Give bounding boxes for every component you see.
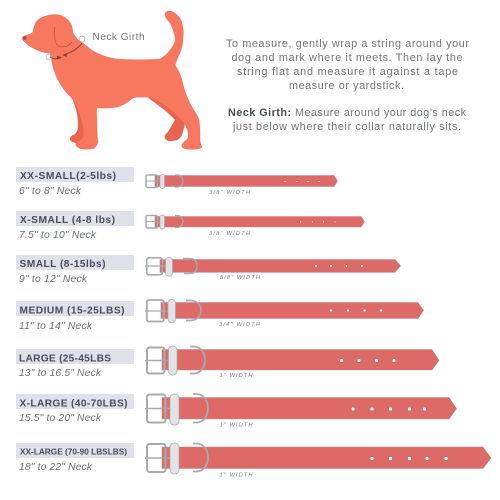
row: x-small: 7.5" to 10" Neck (19, 230, 97, 241)
row: small: SMALL (8-15lbs) (20, 259, 106, 270)
row: xx-large: 18" to 22" Neck (19, 462, 93, 473)
row: xx-large (16, 443, 491, 478)
far legs (70, 96, 185, 143)
instructions paragraph: dog and mark where it meets. Then lay the (232, 52, 462, 64)
row: large: 1" WIDTH (220, 373, 253, 379)
nose (22, 36, 26, 40)
collar (155, 176, 338, 186)
row: xx-small (16, 167, 338, 197)
row: x-large: 1" WIDTH (220, 422, 253, 428)
row: medium (16, 300, 424, 332)
row: x-large: 15.5" to 20" Neck (19, 413, 102, 424)
neck girth instructions: Neck Girth: Measure around your dog’s neck (228, 107, 467, 119)
row: x-small: X-SMALL (4-8 lbs) (20, 215, 115, 226)
row: xx-large: 1" WIDTH (220, 472, 253, 478)
girth arrows (57, 53, 67, 60)
row: xx-small: 6" to 8" Neck (19, 186, 82, 197)
instructions paragraph: To measure, gently wrap a string around your (226, 38, 469, 50)
row: small (16, 255, 400, 285)
instructions paragraph: measure or yardstick. (289, 80, 404, 92)
row: x-small (16, 211, 364, 241)
row: large: 13" to 16.5" Neck (19, 368, 102, 379)
size label (16, 167, 134, 182)
dog illustration (22, 11, 202, 149)
row: xx-large: XX-LARGE (70-90 LBSLBS) (20, 446, 127, 456)
row: large: LARGE (25-45LBS (19, 354, 111, 364)
row: medium: 11" to 14" Neck (19, 321, 93, 332)
dog body (23, 11, 202, 149)
row: small: 9" to 12" Neck (19, 274, 88, 285)
row: small: 5/8" WIDTH (220, 275, 261, 281)
row: x-small: 3/8" WIDTH (209, 231, 251, 237)
neck girth string (50, 43, 82, 59)
row: x-large: X-LARGE (40-70LBS) (20, 398, 128, 410)
row: x-large (16, 394, 456, 428)
row: medium: 3/4" WIDTH (219, 322, 261, 328)
neck girth instructions (228, 107, 467, 133)
row: large (16, 346, 439, 379)
row: xx-small: XX-SMALL(2-5lbs) (20, 171, 116, 182)
ear (54, 27, 72, 47)
row: xx-small: 3/8" WIDTH (209, 190, 251, 196)
instructions paragraph: string flat and measure it against a tape (237, 66, 458, 78)
neck girth label: Neck Girth (92, 32, 144, 43)
row: medium: MEDIUM (15-25LBS) (20, 306, 124, 316)
instructions paragraph (226, 38, 469, 92)
neck girth instructions: just below where their collar naturally sits. (232, 121, 461, 133)
